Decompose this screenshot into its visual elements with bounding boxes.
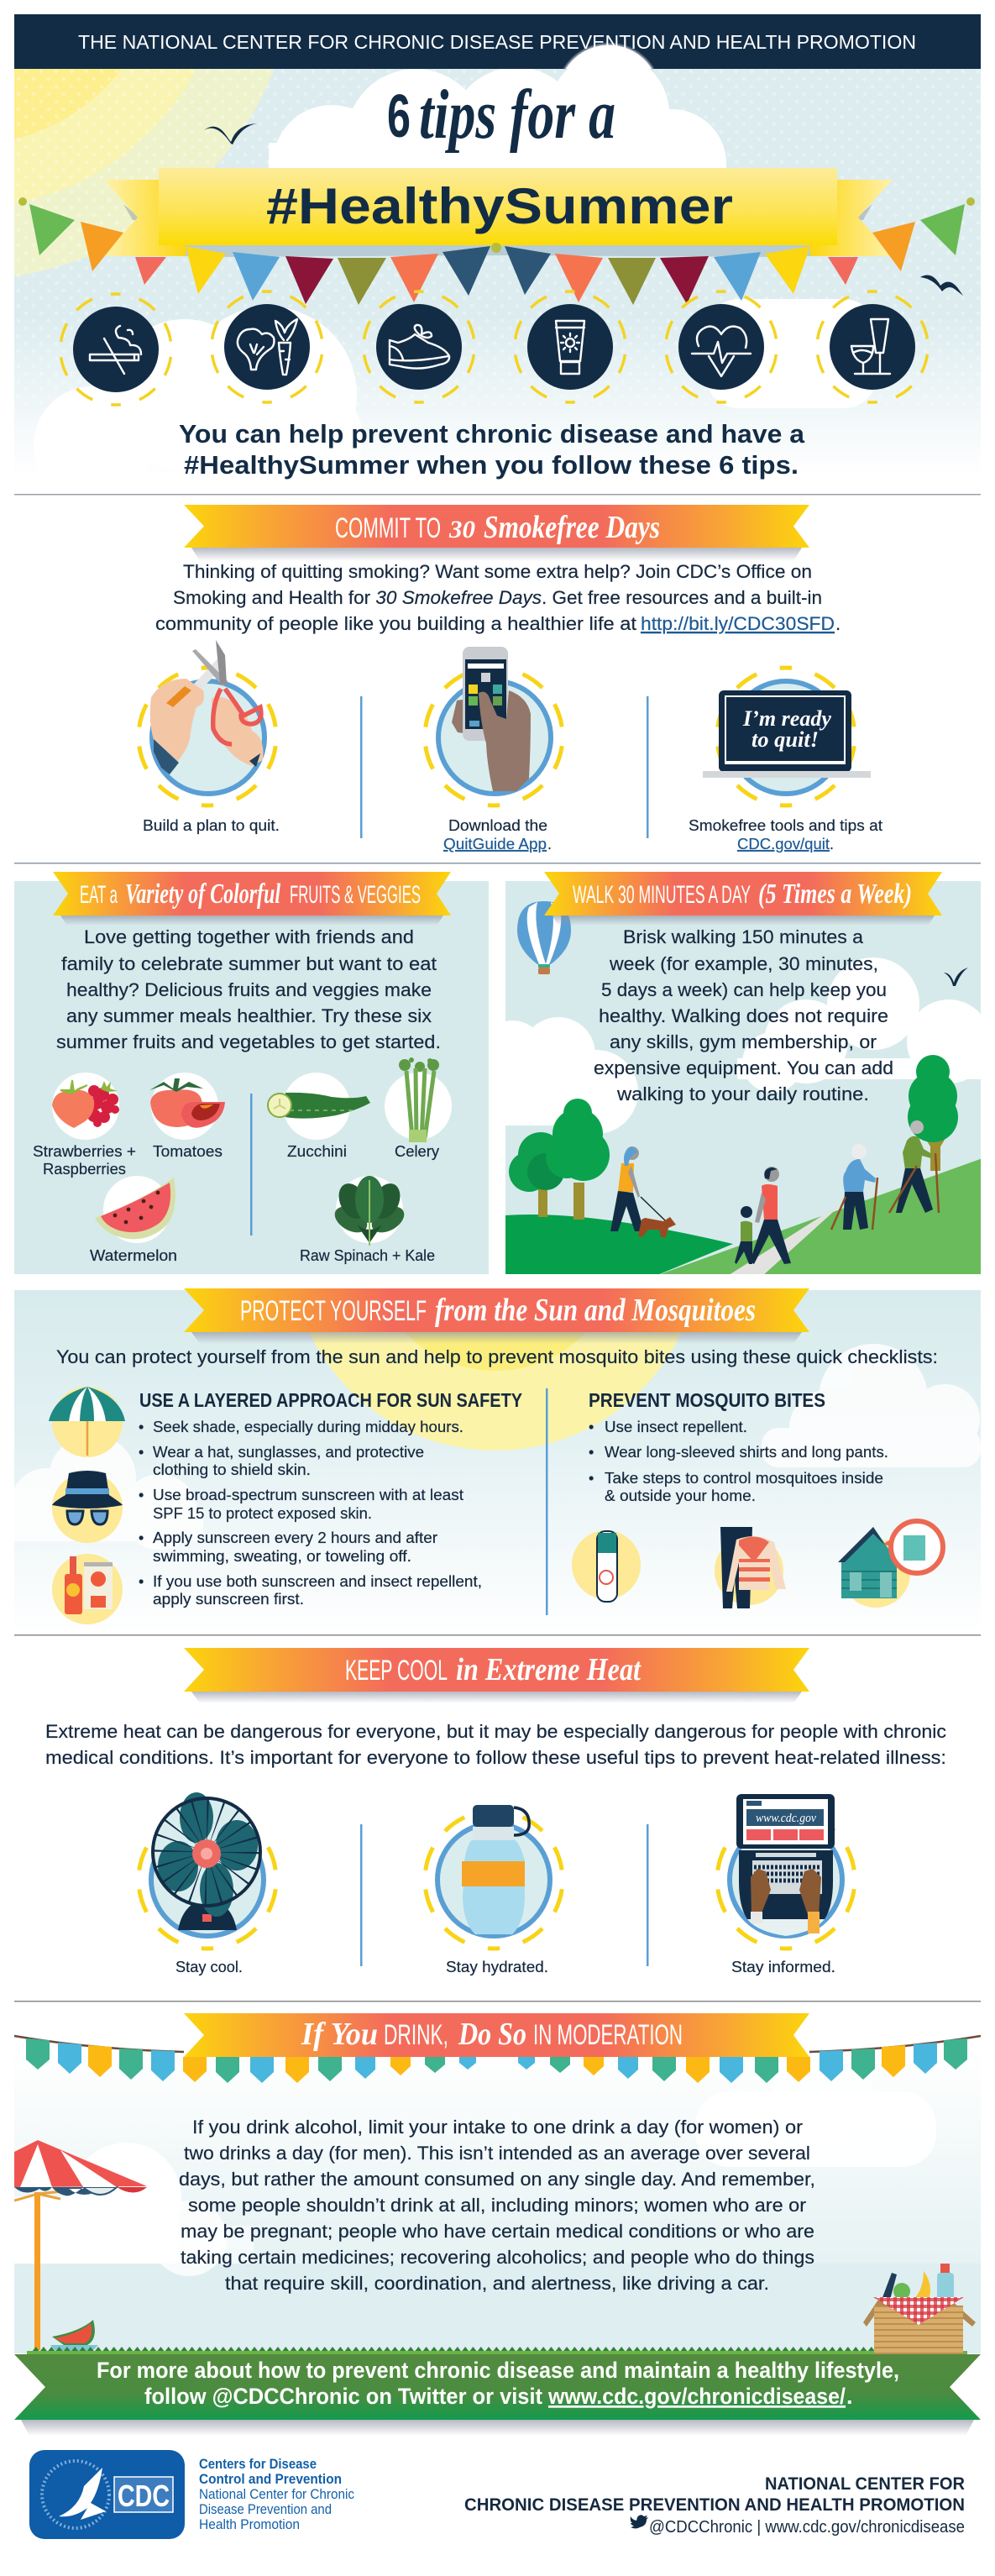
body text: moderation	[179, 2117, 815, 2294]
icon: heart with pulse	[658, 284, 784, 410]
heading ribbon: commit: 30	[448, 516, 475, 543]
intro text: commit	[155, 561, 841, 634]
hero panel	[14, 69, 981, 440]
heading ribbon: fruits: Variety of Colorful	[125, 879, 280, 910]
hero sky and sun	[14, 69, 981, 440]
caption: build a plan: Build a plan to quit.	[143, 817, 280, 834]
checklist: sun safety: swimming, sweating, or toweling off.	[153, 1548, 411, 1565]
intro text: keep cool	[45, 1721, 946, 1768]
footer: cdc organisation text: Disease Prevention and	[199, 2501, 332, 2517]
caption: download app: .	[547, 836, 552, 853]
green call-to-action banner: .	[846, 2384, 853, 2409]
checklist: mosquito bites: •	[589, 1419, 594, 1435]
title: 6 tips for a	[387, 76, 615, 154]
body text: walk: Brisk walking 150 minutes a	[623, 926, 864, 947]
bunting flags	[18, 197, 975, 305]
footer: cdc logo	[29, 2450, 185, 2539]
checklist: sun safety: SPF 15 to protect exposed skin.	[153, 1505, 372, 1522]
heading ribbon: walk: (5 Times a Week)	[758, 879, 912, 910]
icon: laptop i'm ready to quit	[703, 658, 871, 815]
park scene	[479, 901, 991, 1277]
caption: stay hydrated: Stay hydrated.	[446, 1959, 548, 1975]
icon: bird right	[920, 275, 963, 296]
icon: house with screen	[838, 1521, 943, 1608]
icon: long sleeves and pants	[715, 1527, 786, 1608]
heading ribbon: keep cool	[184, 1648, 809, 1703]
body text: moderation: may be pregnant; people who have certain medical conditions or who are	[181, 2221, 814, 2242]
cloud behind title	[269, 53, 726, 223]
body text: fruits: family to celebrate summer but want to eat	[61, 953, 437, 974]
green call-to-action banner: follow @CDCChronic on Twitter or visit	[144, 2384, 542, 2409]
footer: cdc organisation text: Control and Prevention	[199, 2471, 342, 2487]
heading ribbon: walk: WALK 30 MINUTES A DAY	[573, 881, 751, 909]
body text: moderation: that require skill, coordination, and alertness, like driving a car.	[225, 2273, 769, 2294]
checklist: mosquito bites: & outside your home.	[605, 1487, 756, 1504]
icon: fan	[129, 1792, 285, 1958]
body text: walk: walking to your daily routine.	[616, 1083, 869, 1104]
intro text: keep cool: Extreme heat can be dangerous for everyone, but it may be especially dangerous for people with chronic	[45, 1721, 946, 1742]
icon: broccoli and carrot	[204, 284, 330, 410]
icon: strawberries and raspberries	[52, 1073, 119, 1140]
body text: moderation: two drinks a day (for men). This isn’t intended as an average over several	[184, 2143, 810, 2164]
body text: walk: healthy. Walking does not require	[599, 1005, 888, 1026]
icon row: six tips	[53, 284, 935, 412]
body text: fruits	[56, 926, 441, 1052]
body text: walk	[594, 926, 893, 1104]
icon: small bird	[944, 968, 968, 986]
heading ribbon: commit: COMMIT TO	[335, 512, 441, 544]
heading ribbon: fruits: FRUITS & VEGGIES	[290, 881, 421, 909]
checklist: sun safety: Seek shade, especially during midday hours.	[153, 1419, 463, 1435]
footer: national center text: @CDCChronic | www.cdc.gov/chronicdisease	[649, 2518, 965, 2537]
heading ribbon: keep cool: in Extreme Heat	[456, 1652, 642, 1687]
sky, sun and clouds	[14, 1290, 981, 1577]
hero tagline: #HealthySummer when you follow these 6 tips.	[184, 450, 799, 480]
checklist: sun safety: •	[139, 1444, 144, 1461]
panel: drink in moderation	[14, 2013, 981, 2354]
body text: fruits: Love getting together with friends and	[84, 926, 414, 947]
hero tagline	[179, 419, 805, 480]
heading ribbon: protect: from the Sun and Mosquitoes	[435, 1293, 756, 1328]
checklist: sun safety: Wear a hat, sunglasses, and protective	[153, 1444, 424, 1461]
icon: laptop www.cdc.gov	[708, 1794, 864, 1958]
section: commit to 30 smokefree days	[129, 505, 882, 853]
footer: cdc organisation text: Health Promotion	[199, 2516, 300, 2532]
green call-to-action banner: For more about how to prevent chronic disease and maintain a healthy lifestyle,	[97, 2358, 899, 2383]
icon: repellent spray	[572, 1530, 641, 1602]
icon: watermelon slice	[50, 2320, 98, 2351]
food labels: Celery	[395, 1143, 439, 1160]
checklist: sun safety: Apply sunscreen every 2 hours and after	[153, 1529, 437, 1546]
icon: spinach and kale	[330, 1176, 409, 1246]
checklist: mosquito bites: •	[589, 1470, 594, 1487]
panel: eat fruits and veggies	[14, 872, 489, 1274]
icon: twitter bird	[631, 2515, 648, 2528]
checklist: sun safety: If you use both sunscreen and insect repellent,	[153, 1573, 482, 1590]
footer: cdc logo: CDC	[118, 2479, 170, 2513]
checklist: mosquito bites: PREVENT MOSQUITO BITES	[589, 1389, 825, 1411]
body text: fruits: any summer meals healthier. Try these six	[66, 1005, 432, 1026]
intro text: commit: Smoking and Health for 30 Smokefree Days. Get free resources and a built-in	[173, 587, 822, 608]
sky and clouds	[14, 2041, 981, 2353]
icon: picnic umbrella	[14, 2140, 147, 2350]
green call-to-action banner	[14, 2354, 981, 2436]
footer: cdc organisation text: Centers for Disease	[199, 2456, 317, 2472]
food labels: Raw Spinach + Kale	[300, 1247, 435, 1264]
section: keep cool	[45, 1648, 946, 1975]
pennant string	[14, 2036, 981, 2083]
icon: watermelon	[95, 1176, 175, 1243]
footer: cdc organisation text	[199, 2456, 354, 2532]
icon: sunscreen bottles	[52, 1554, 123, 1624]
footer: national center text	[464, 2474, 965, 2537]
title: 6 tips for a: 6	[387, 83, 411, 150]
icon: zucchini	[268, 1073, 370, 1140]
heading ribbon: moderation: DRINK,	[384, 2019, 448, 2051]
heading ribbon: protect: PROTECT YOURSELF	[240, 1295, 427, 1327]
icon: tomatoes	[149, 1073, 225, 1140]
icon: no smoking	[53, 286, 179, 412]
checklist: mosquito bites: Take steps to control mosquitoes inside	[605, 1470, 883, 1487]
icon: sunscreen tube	[507, 284, 633, 410]
checklist: sun safety: clothing to shield skin.	[153, 1461, 311, 1478]
heading ribbon: moderation	[184, 2013, 809, 2057]
intro text: protect: You can protect yourself from the sun and help to prevent mosquito bites using these quick checklists:	[56, 1346, 938, 1367]
food labels: Strawberries +	[33, 1143, 136, 1160]
intro text: commit: community of people like you building a healthier life at	[155, 613, 636, 634]
caption: download app: Download the	[448, 817, 547, 834]
intro text: commit: Thinking of quitting smoking? Want some extra help? Join CDC’s Office on	[183, 561, 812, 582]
icon: laptop www.cdc.gov: www.cdc.gov	[756, 1812, 816, 1825]
checklist: sun safety: •	[139, 1573, 144, 1590]
heading ribbon: walk	[544, 872, 942, 926]
walker: older woman	[889, 1120, 939, 1213]
checklist: mosquito bites: •	[589, 1444, 594, 1461]
heading ribbon: fruits: EAT a	[80, 881, 118, 909]
checklist: sun safety: Use broad-spectrum sunscreen with at least	[153, 1487, 463, 1503]
food labels	[33, 1143, 439, 1264]
checklist: sun safety: USE A LAYERED APPROACH FOR SUN SAFETY	[139, 1389, 522, 1411]
header bar: THE NATIONAL CENTER FOR CHRONIC DISEASE PREVENTION AND HEALTH PROMOTION	[78, 31, 916, 53]
yellow banner: #HealthySummer	[102, 168, 894, 257]
hills and path	[653, 1158, 982, 1277]
footer: cdc organisation text: National Center for Chronic	[199, 2486, 354, 2502]
heading ribbon: moderation: IN MODERATION	[533, 2019, 683, 2051]
body text: walk: 5 days a week) can help keep you	[601, 979, 887, 1000]
heading ribbon: commit: Smokefree Days	[484, 510, 660, 545]
icon: laptop i'm ready to quit: I’m ready	[742, 706, 831, 731]
heading ribbon: moderation: Do So	[458, 2017, 526, 2052]
walker: man and child	[735, 1167, 791, 1264]
checklist: mosquito bites	[589, 1389, 888, 1504]
icon: picnic basket	[863, 2264, 976, 2354]
yellow banner: #HealthySummer: #HealthySummer	[266, 178, 733, 234]
icon: beach umbrella	[49, 1387, 125, 1457]
heading ribbon: moderation: If You	[301, 2017, 378, 2052]
body text: moderation: If you drink alcohol, limit your intake to one drink a day (for women) or	[192, 2117, 803, 2138]
food labels: Tomatoes	[153, 1143, 223, 1160]
body text: walk: week (for example, 30 minutes,	[609, 953, 878, 974]
checklist: mosquito bites: Use insect repellent.	[605, 1419, 747, 1435]
checklist: sun safety: •	[139, 1419, 144, 1435]
footer: national center text: NATIONAL CENTER FOR	[765, 2474, 965, 2494]
icon: walking shoe	[356, 284, 482, 410]
checklist: sun safety: •	[139, 1529, 144, 1546]
body text: walk: any skills, gym membership, or	[610, 1031, 877, 1052]
icon: water bottle	[416, 1802, 572, 1958]
caption: smokefree tools: CDC.gov/quit	[737, 836, 830, 853]
icon: celery	[385, 1057, 452, 1142]
walker: woman with dog	[610, 1146, 676, 1237]
caption: download app: QuitGuide App	[443, 836, 547, 853]
checklist: mosquito bites: Wear long-sleeved shirts and long pants.	[605, 1444, 888, 1461]
caption: stay cool: Stay cool.	[175, 1959, 243, 1975]
checklist: sun safety: apply sunscreen first.	[153, 1591, 304, 1608]
heading ribbon: protect	[184, 1288, 809, 1344]
body text: fruits: healthy? Delicious fruits and veggies make	[66, 979, 432, 1000]
green call-to-action banner: www.cdc.gov/chronicdisease/	[547, 2384, 846, 2409]
hero tagline: You can help prevent chronic disease and have a	[179, 419, 805, 449]
header bar	[14, 14, 981, 69]
icon: hands cutting cigarette	[129, 640, 285, 815]
title: 6 tips for a: tips for a	[419, 76, 615, 154]
body text: moderation: some people shouldn’t drink at all, including minors; women who are or	[188, 2195, 806, 2216]
body text: moderation: days, but rather the amount consumed on any single day. And remember,	[179, 2169, 815, 2190]
icon: hot air balloon	[517, 901, 571, 974]
intro text: keep cool: medical conditions. It’s important for everyone to follow these useful tips to prevent heat-related illness:	[45, 1747, 946, 1768]
clouds	[479, 957, 991, 1134]
body text: fruits: summer fruits and vegetables to get started.	[56, 1031, 441, 1052]
body text: moderation: taking certain medicines; recovering alcoholics; and people who do things	[181, 2247, 814, 2268]
body text: walk: expensive equipment. You can add	[594, 1057, 893, 1078]
panel: protect yourself	[14, 1288, 981, 1624]
caption: smokefree tools: Smokefree tools and tips at	[689, 817, 882, 834]
trees	[509, 1055, 958, 1220]
food labels: Raspberries	[43, 1161, 126, 1178]
grass	[27, 2347, 967, 2354]
panel: walk 30 minutes a day	[479, 872, 991, 1277]
checklist: sun safety: •	[139, 1487, 144, 1503]
icon: laptop i'm ready to quit: to quit!	[751, 727, 819, 752]
icon: bird left	[204, 123, 257, 144]
caption: smokefree tools: .	[830, 836, 834, 853]
heading ribbon: keep cool: KEEP COOL	[345, 1655, 448, 1687]
icon: phone in hand	[416, 647, 572, 815]
caption: smokefree tools	[689, 817, 882, 853]
food labels: Watermelon	[90, 1247, 177, 1264]
intro text: commit: http://bit.ly/CDC30SFD	[641, 613, 835, 634]
caption: download app	[443, 817, 552, 853]
icon: hat and sunglasses	[52, 1471, 123, 1543]
walker: older man	[831, 1144, 877, 1230]
intro text: commit: .	[835, 613, 841, 634]
caption: stay informed: Stay informed.	[731, 1959, 835, 1975]
heading ribbon: fruits	[53, 872, 451, 926]
checklist: sun safety	[139, 1389, 522, 1608]
icon: glasses of alcohol	[809, 284, 935, 410]
food labels: Zucchini	[287, 1143, 347, 1160]
footer: national center text: CHRONIC DISEASE PREVENTION AND HEALTH PROMOTION	[464, 2495, 965, 2515]
heading ribbon: commit	[184, 505, 809, 561]
